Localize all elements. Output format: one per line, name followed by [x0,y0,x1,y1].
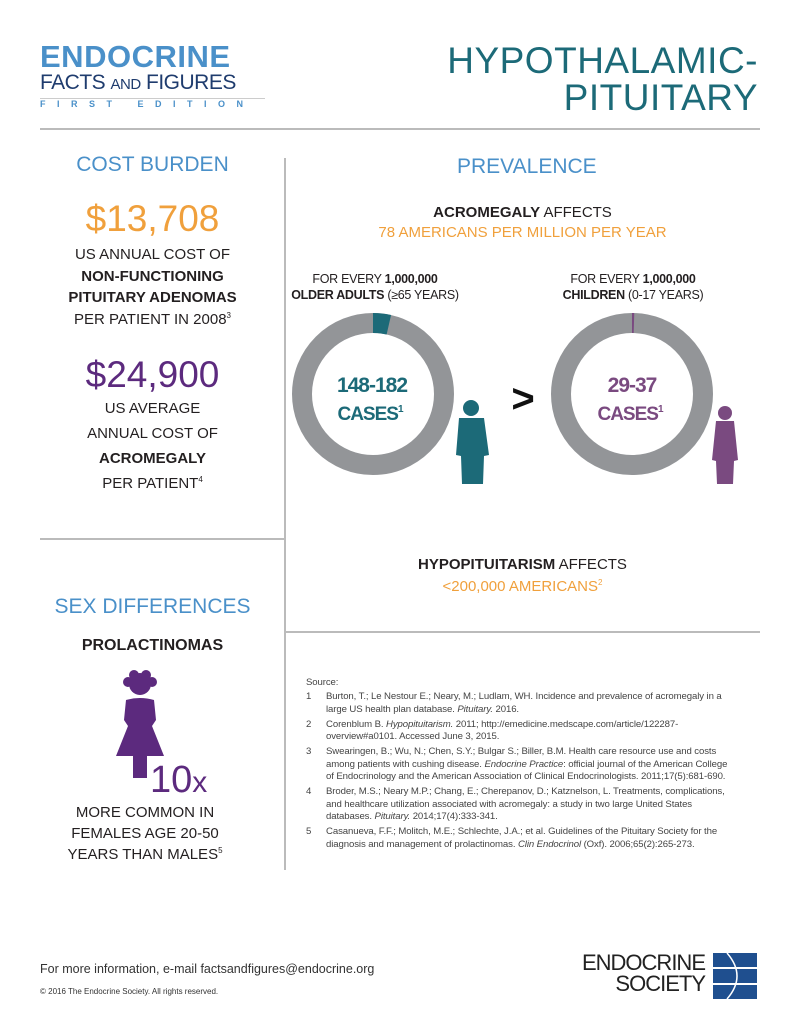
chart: donuts: 1 [398,404,404,415]
text: acromegaly affects: ACROMEGALY AFFECTS [433,204,612,221]
text: acromegaly cost [87,400,218,492]
text block: sources: Corenblum B. Hypopituitarism. 2011; http://emedicine.medscape.com/article/122287-overview#a0101. Accessed June 3, 2015. [326,719,678,742]
text: non-functioning: US ANNUAL COST OF [75,246,230,263]
heading: cost burden: COST BURDEN [76,153,229,176]
subheading: PROLACTINOMAS [82,637,223,654]
logo: endocrine facts and figures: ENDOCRINE [40,39,231,74]
text block: sources: Broder, M.S.; Neary M.P.; Chang, E.; Cherepanov, D.; Katznelson, L. Treatments, complications, and healthcare utilization associated with acromegaly: a study in two large United States databases. Pituitary. 2014;17(4):333-341. [326,786,725,822]
logo: endocrine society: ENDOCRINE [582,950,705,975]
text block: sources: Source: [306,677,338,688]
icon: child silhouette [712,406,738,484]
text: more common: MORE COMMON IN [76,804,214,821]
footer: copyright: © 2016 The Endocrine Society. All rights reserved. [40,987,218,996]
text: acromegaly cost: PER PATIENT4 [102,475,203,492]
label: children: CHILDREN (0-17 YEARS) [563,288,703,302]
text: 148-182 cases: 148-182 [337,374,407,397]
text: 29-37 cases: 29-37 [608,374,657,397]
donut: older adults [302,323,444,465]
text block: sources: 4 [306,786,311,797]
text: acromegaly cost: ANNUAL COST OF [87,425,218,442]
stat: 10x: 10x [150,759,207,801]
label: older adults: FOR EVERY 1,000,000 [312,272,438,286]
text block: sources: 2 [306,719,311,730]
text block: sources: 3 [306,746,311,757]
title [447,40,758,118]
text block: sources: 1 [306,691,311,702]
title: HYPOTHALAMIC- [447,40,758,81]
chart: donuts [292,313,738,484]
chart: donuts: CASES [337,404,398,425]
logo: endocrine facts and figures [40,39,265,109]
panel: cost burden [68,153,237,492]
text: acromegaly affects: 78 AMERICANS PER MILLION PER YEAR [378,224,667,241]
text: more common: YEARS THAN MALES5 [67,846,223,863]
text: acromegaly cost: US AVERAGE [105,400,200,417]
chart: donuts: 1 [658,404,664,415]
heading: prevalence: PREVALENCE [457,155,597,178]
icon: greater than: > [511,377,535,421]
text: acromegaly cost: ACROMEGALY [99,450,206,467]
donut: children [561,323,703,465]
icon: girl [116,670,164,778]
logo: endocrine society [582,950,757,999]
label: older adults [291,272,459,302]
text block: sources: 5 [306,826,311,837]
text block: sources: Burton, T.; Le Nestour E.; Neary, M.; Ludlam, WH. Incidence and prevalence of acromegaly in a large US health plan database. Pituitary. 2016. [326,691,722,715]
text: non-functioning [68,246,237,328]
text block: sources: Casanueva, F.F.; Molitch, M.E.; Schlechte, J.A.; et al. Guidelines of the Pituitary Society for the diagnosis and management of prolactinomas. Clin Endocrinol (Oxf). 2006;65(2):265-273. [326,826,717,850]
logo: endocrine society: SOCIETY [615,971,705,996]
title: PITUITARY [564,77,758,118]
text: hypopituitarism [418,556,627,595]
logo: endocrine facts and figures: FIRST EDITION [40,99,254,109]
stat: $24,900: $24,900 [86,354,219,395]
text block: sources [306,677,727,850]
heading: SEX DIFFERENCES [54,595,251,618]
logo: endocrine facts and figures: FACTS AND FIGURES [40,71,236,94]
text: non-functioning: PER PATIENT IN 20083 [74,310,231,328]
chart: donuts: CASES [597,404,658,425]
text: more common [67,804,223,863]
label: older adults: OLDER ADULTS (≥65 YEARS) [291,288,459,302]
stat: $13,708: $13,708 [86,198,219,239]
text: acromegaly affects [378,204,667,241]
panel: sex differences [54,595,251,654]
text: hypopituitarism: <200,000 AMERICANS2 [443,578,602,595]
icon: man silhouette [456,400,489,484]
label: children [563,272,703,302]
text: non-functioning: NON-FUNCTIONING [81,268,224,284]
text: hypopituitarism: HYPOPITUITARISM AFFECTS [418,556,627,573]
text: non-functioning: PITUITARY ADENOMAS [68,289,237,306]
text: more common: FEMALES AGE 20-50 [71,825,219,842]
label: children: FOR EVERY 1,000,000 [570,272,696,286]
footer: contact: For more information, e-mail factsandfigures@endocrine.org [40,962,374,976]
text block: sources: Swearingen, B.; Wu, N.; Chen, S.Y.; Bulgar S.; Biller, B.M. Health care resource use and costs among patients with cushing disease. Endocrine Practice: official journal of the American College of Endocrinology and the American Association of Clinical Endocrinologists. 2011;17(5):681-690. [326,746,727,782]
